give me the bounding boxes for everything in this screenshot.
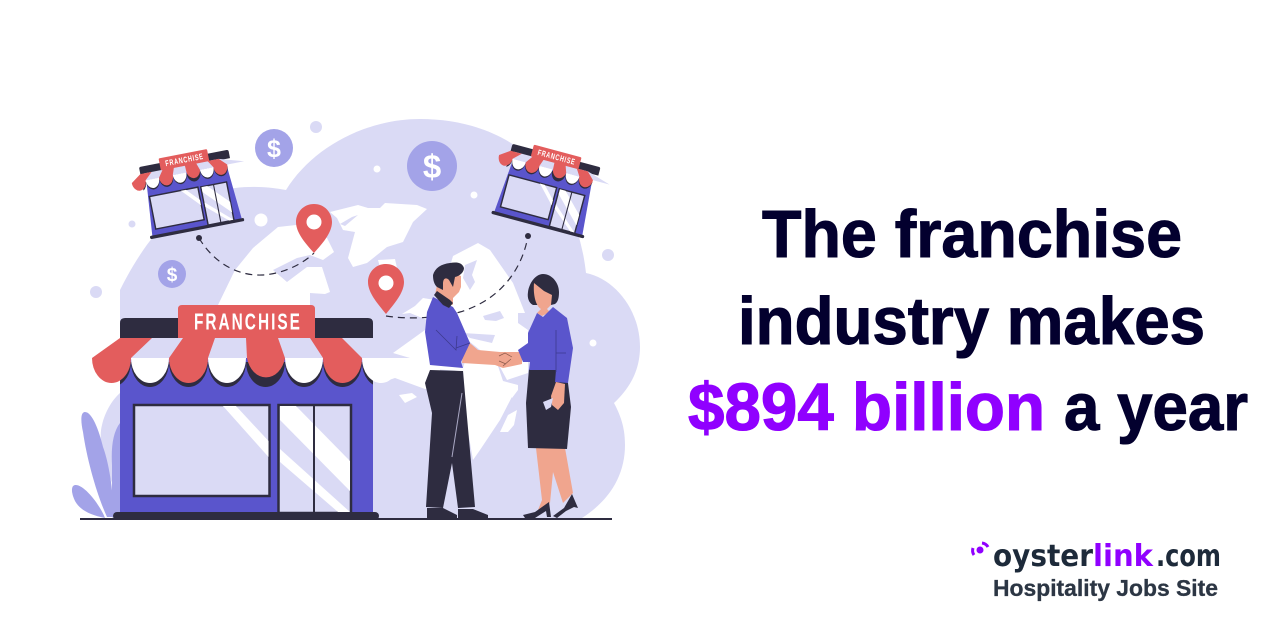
store wall: [120, 358, 373, 513]
shop door: [278, 405, 351, 513]
store roof bar: [120, 318, 373, 338]
icon: dollar coin top left: [255, 129, 293, 167]
store sign: FRANCHISE: [194, 310, 302, 335]
icon: map pin lower: [368, 264, 404, 314]
man shirt folds: [436, 330, 470, 350]
store sign: [178, 305, 315, 338]
woman hair: [528, 274, 559, 305]
logo icon: [973, 543, 988, 555]
illustration background blob: [101, 119, 640, 518]
awning underside: [120, 338, 373, 358]
main franchise store: [92, 305, 400, 520]
woman sweater: [518, 307, 573, 383]
awning red stripes: [92, 338, 362, 383]
shop window: [134, 405, 270, 496]
man collar: [434, 291, 453, 308]
handshake fingers: [499, 353, 512, 366]
man arm: [462, 338, 522, 368]
logo tagline: Hospitality Jobs Site: [993, 575, 1218, 601]
woman face: [534, 283, 552, 316]
woman sleeve crease: [556, 330, 566, 372]
headline line 1: The franchise: [762, 197, 1182, 272]
headline highlight: $894 billion: [688, 370, 1045, 445]
icon: dollar coin small: $: [167, 265, 178, 286]
woman hand and phone: [551, 382, 565, 410]
man hair: [433, 263, 464, 290]
icon: map pin upper: [296, 204, 332, 253]
woman skirt: [526, 369, 571, 449]
headline line 3 end: a year: [1064, 370, 1248, 445]
man ear: [442, 278, 448, 286]
small franchise store right: [492, 144, 609, 238]
dashed route left: [196, 235, 314, 275]
plant: [72, 412, 120, 518]
man neck and face: [435, 270, 461, 305]
icon: dollar coin top left: $: [267, 135, 281, 163]
map lakes and gaps: [340, 215, 504, 343]
woman legs: [536, 448, 573, 510]
logo: .com: [1156, 539, 1221, 574]
icon: dollar coin small: [158, 260, 186, 288]
man shaking hands: [425, 263, 522, 518]
awning white scallops: [131, 358, 400, 383]
ground line: [80, 518, 612, 520]
awning shadow: [120, 362, 373, 387]
store base: [113, 512, 379, 520]
woman shoes: [523, 494, 578, 518]
logo wordmark: oyster: [993, 539, 1093, 574]
headline line 2: industry makes: [738, 284, 1205, 359]
man shirt: [425, 297, 470, 368]
icon: dollar coin top centre: [407, 141, 457, 191]
logo: [973, 539, 1221, 601]
icon: dollar coin top centre: $: [423, 148, 441, 185]
small franchise store left: [132, 149, 244, 239]
man belt: [430, 365, 463, 371]
small franchise store right: FRANCHISE: [537, 149, 576, 167]
world map continents: [205, 203, 528, 460]
small franchise store left: FRANCHISE: [165, 153, 204, 169]
logo: link: [1093, 539, 1154, 574]
decorative dots: [90, 121, 614, 346]
headline: [688, 197, 1248, 445]
man shoes: [427, 508, 488, 518]
infographic canvas: [72, 119, 1248, 602]
woman shaking hands: [518, 274, 578, 518]
dashed route right: [386, 233, 531, 318]
man trousers: [425, 370, 475, 508]
